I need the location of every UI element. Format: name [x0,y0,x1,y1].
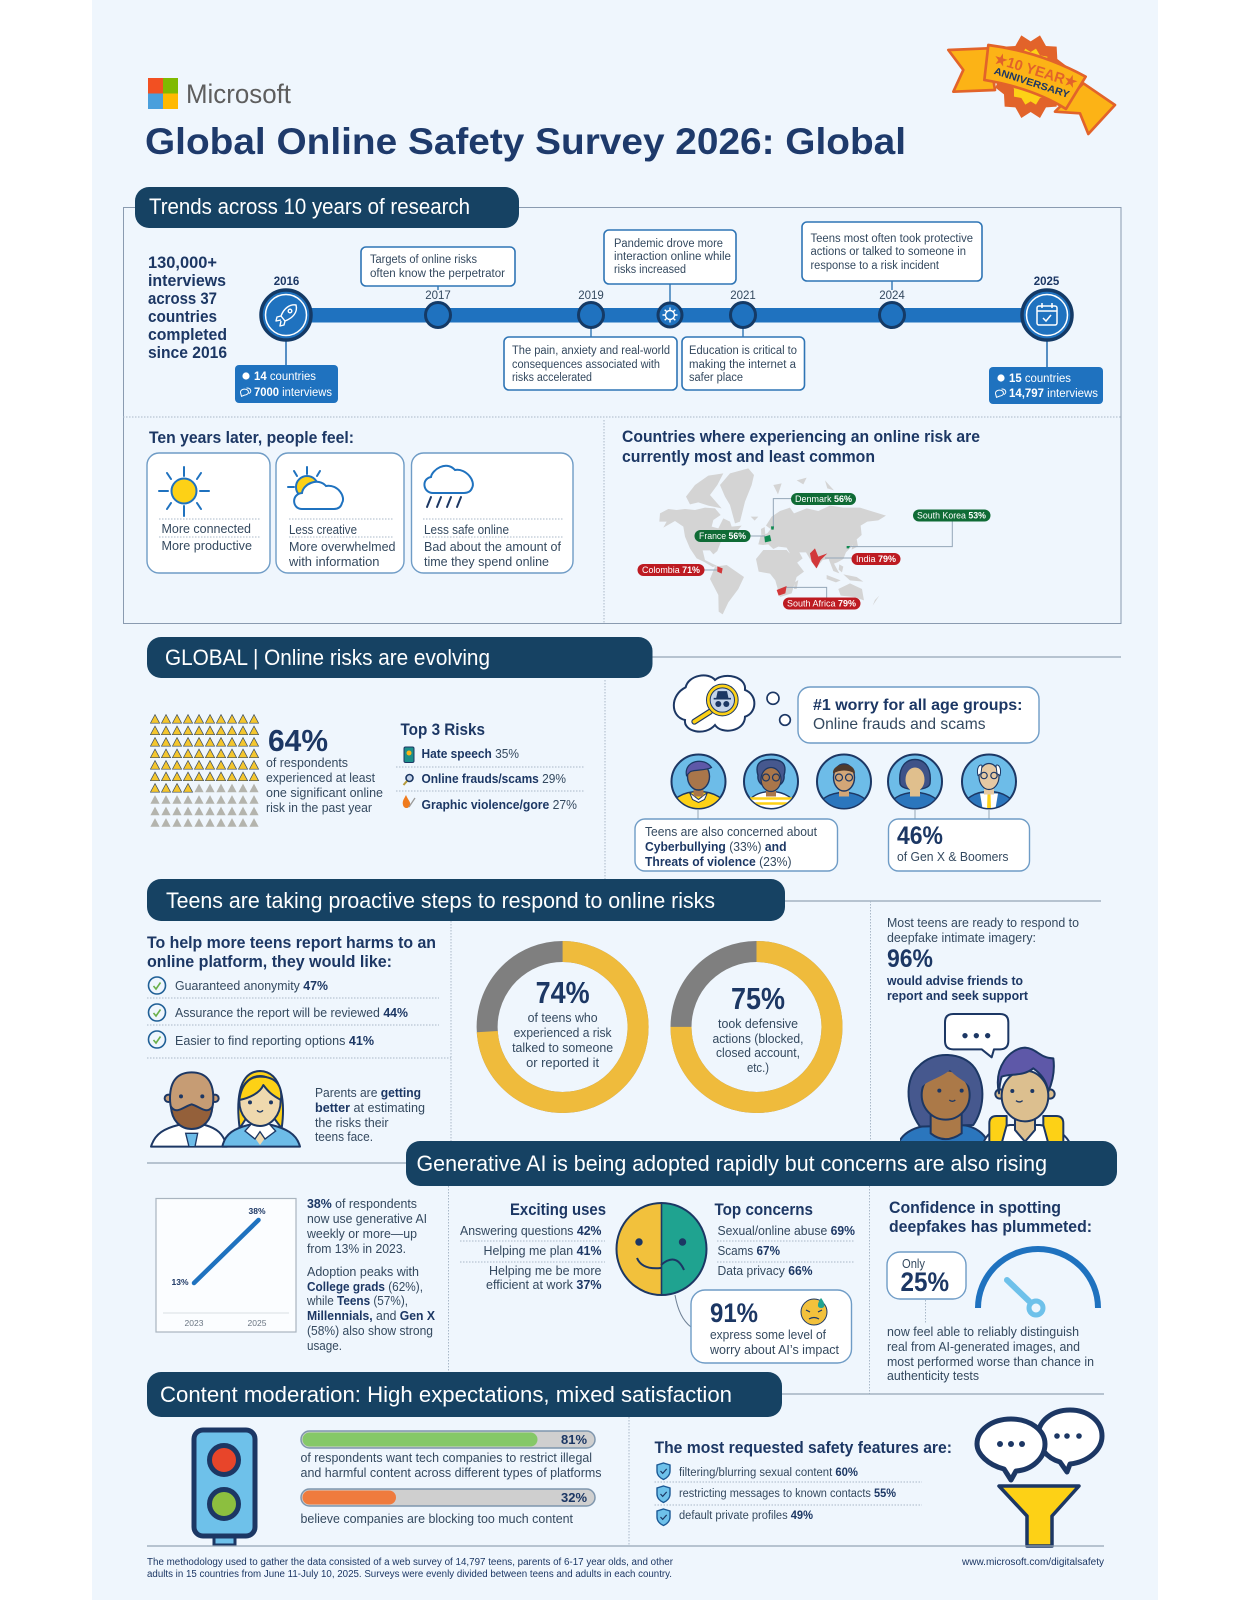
donut chart: 75%: etc.) [747,1061,769,1075]
callout: 2017 [361,247,515,286]
callout: pandemic: Pandemic drove more [614,238,723,250]
list: top concerns [714,1200,855,1278]
donut chart: 74%: talked to someone [512,1041,613,1055]
stat: 96%: report and seek support [887,989,1029,1003]
text: parents: teens face. [315,1130,373,1144]
card: sun [147,453,270,573]
heading: report harms [147,933,436,971]
world map [659,468,952,614]
list: top 3 risks: Graphic violence/gore 27% [422,798,577,812]
year labels [274,276,1060,302]
badge: 10 year anniversary: ★10 YEAR★ [992,51,1080,92]
stat: 64%: one significant online [266,786,383,800]
callout: #1 worry [798,687,1039,743]
avatar: boomer man [961,754,1017,810]
map label: India: India 79% [856,554,897,565]
map label: South Africa: South Africa 79% [787,598,857,610]
Microsoft logo: Microsoft [186,79,291,109]
list: safety features [654,1463,922,1526]
illustration: teens with speech bubble [898,1014,1070,1143]
icon: rocket [276,305,296,326]
callout: only 25%: 25% [900,1267,949,1297]
section heading: content moderation: Content moderation: High expectations, mixed satisfaction [160,1382,732,1407]
donut chart: 75%: took defensive [718,1017,798,1031]
list: exciting uses: efficient at work 37% [486,1278,602,1292]
card: partly cloudy: More overwhelmed [289,540,396,554]
card: sun: More productive [162,539,252,553]
heading: report harms: online platform, they would like: [147,952,392,971]
heading: countries [622,427,980,466]
icon: worried emoji [801,1298,827,1325]
text: adoption: usage. [307,1339,342,1353]
stat: 96%: deepfake intimate imagery: [887,931,1036,945]
callout: #1 worry: #1 worry for all age groups: [813,697,1022,714]
callout: 2021: making the internet a [689,359,797,371]
card: rain: Bad about the amount of [424,540,562,554]
callout: teens also concerned: Threats of violence (23%) [645,855,792,869]
section heading: online risks: GLOBAL | Online risks are evolving [165,645,490,670]
progress bar: 32% [300,1489,595,1526]
panel: trends across 10 years [123,187,1121,624]
stat box: 2016: 14 countries [254,371,316,383]
icon: two-sided face [616,1203,707,1295]
progress bar: 81%: 81% [561,1433,587,1447]
donut chart: 75%: closed account, [716,1046,800,1060]
card: rain: Less safe online [424,523,509,537]
callout: 2024 [802,222,982,281]
text: parents: better at estimating [315,1101,425,1115]
footer: methodology note [147,1557,674,1580]
map label: South Korea: South Korea 53% [917,510,987,522]
timeline [261,281,1072,367]
text: adoption: from 13% in 2023. [307,1242,406,1256]
callout: 91%: express some level of [710,1328,827,1342]
list: safety features: restricting messages to known contacts 55% [679,1488,896,1500]
list: top concerns: Data privacy 66% [718,1264,812,1278]
card: rain [412,453,573,573]
year labels: 2019 [578,290,604,302]
callout: 2024: response to a risk incident [810,260,940,272]
callout: teens also concerned: Teens are also concerned about [645,825,818,839]
checklist [148,977,408,1048]
icon: magnifier [404,774,413,785]
list: top concerns: Sexual/online abuse 69% [718,1224,855,1238]
donut chart: 75%: 75% [731,981,785,1016]
stat: 64%: experienced at least [266,771,376,785]
avatar: young man [816,754,872,810]
card: partly cloudy [276,453,404,573]
text: adoption: (58%) also show strong [307,1324,433,1338]
footer: methodology note: The methodology used to gather the data consisted of a web survey of 14,797 teens, parents of 6-17 year olds, and other [147,1557,674,1568]
text: adoption: Millennials, and Gen X [307,1309,436,1323]
callout: pandemic: interaction online while [614,251,731,263]
avatar: teen [670,754,726,810]
callout: pandemic [604,230,736,284]
stat box: 2016 [235,365,338,403]
stat: 130,000+ interviews: interviews [148,272,226,290]
text: adoption: weekly or more—up [306,1227,417,1241]
stat: 64%: risk in the past year [266,801,372,815]
gauge [978,1249,1098,1315]
text: adoption: College grads (62%), [307,1280,423,1294]
list: exciting uses: Exciting uses [510,1200,606,1219]
stat: 96%: 96% [887,945,933,973]
text: adoption: while Teens (57%), [306,1294,408,1308]
stat: 64%: 64% [268,723,328,758]
callout: teens also concerned: Cyberbullying (33%) and [645,840,786,854]
icon: gear [662,308,678,322]
text: deepfakes: now feel able to reliably distinguish [887,1325,1079,1339]
heading: deepfake confidence: Confidence in spotting [889,1198,1061,1217]
section heading: teens: Teens are taking proactive steps to respond to online risks [166,888,715,913]
text: deepfakes: real from AI-generated images, and [887,1340,1080,1354]
callout: 2019 [504,337,677,390]
callout: 2024: Teens most often took protective [810,233,973,245]
section heading: online risks [147,637,652,678]
map label: France: France 56% [699,531,747,542]
callout: 91%: worry about AI’s impact [709,1343,840,1357]
text: parents [315,1086,425,1144]
stat: 130,000+ interviews: across 37 [148,290,217,308]
icon: speech bubbles into funnel [977,1410,1102,1546]
icon: sun and cloud [288,467,343,509]
year labels: 2024 [879,290,905,302]
panel: teens proactive steps [147,879,1101,1163]
stat box: 2025: 14,797 interviews [1009,388,1098,400]
callout: teens also concerned [635,819,838,871]
list: exciting uses: Helping me plan 41% [484,1244,602,1258]
list: safety features: default private profiles 49% [679,1510,813,1522]
callout: 46%: 46% [897,822,943,850]
icon: flame [403,795,415,808]
checklist: Guaranteed anonymity 47% [175,979,328,993]
icon: sun [159,467,209,516]
donut chart: 74%: or reported it [526,1056,600,1070]
panel: online risks are evolving [147,637,1121,879]
stat: 96% [886,916,1079,1003]
map label: Denmark: Denmark 56% [795,494,853,505]
text: parents: the risks their [315,1116,388,1130]
year labels: 2016 [274,276,299,288]
list: top concerns: Top concerns [714,1200,813,1219]
callout: 46% [888,819,1030,871]
donut chart: 75%: actions (blocked, [712,1032,804,1046]
callout: 2021: Education is critical to [689,345,797,357]
icon: rain cloud [424,466,473,507]
section heading: generative AI [406,1141,1117,1186]
stat: 130,000+ interviews [148,254,227,362]
donut chart: 74% [487,952,638,1102]
icon: phone [404,747,414,762]
heading: deepfake confidence [889,1198,1092,1236]
callout: 46%: of Gen X & Boomers [897,850,1008,864]
card: partly cloudy: with information [288,555,380,569]
progress bar: 32%: believe companies are blocking too much content [300,1512,574,1526]
callout: 91%: 91% [710,1298,758,1328]
section heading: teens [147,879,785,921]
milestone 2025 [1022,290,1072,340]
heading: safety features: The most requested safety features are: [654,1438,952,1457]
section heading: generative AI: Generative AI is being adopted rapidly but concerns are also rising [416,1151,1047,1176]
progress bar: 32%: 32% [561,1491,587,1505]
panel: generative AI [156,1141,1117,1394]
stat box: 2016: 7000 interviews [254,387,332,399]
list: exciting uses: Answering questions 42% [460,1224,602,1238]
section heading: content moderation [147,1372,782,1417]
avatar: millennial woman [743,754,799,810]
year labels: 2025 [1034,276,1060,288]
heading: countries: Countries where experiencing an online risk are [622,427,980,446]
callout: #1 worry: Online frauds and scams [813,716,986,733]
card: sun: More connected [162,522,251,536]
text: adoption [306,1197,436,1353]
stat: 130,000+ interviews: countries [148,308,217,326]
heading: deepfake confidence: deepfakes has plummeted: [889,1217,1092,1236]
stat: 96%: would advise friends to [886,974,1023,988]
callout: 2019: consequences associated with [512,359,660,371]
callout: 2017: Targets of online risks [370,254,477,266]
callout: 2019: The pain, anxiety and real-world [512,345,670,357]
text: parents: Parents are getting [315,1086,421,1100]
stat box: 2025 [989,367,1103,404]
list: top concerns: Scams 67% [718,1244,780,1258]
donut chart: 74%: 74% [536,975,590,1010]
section heading: trends [135,187,519,228]
callout: only 25%: Only [902,1257,926,1271]
heading: report harms: To help more teens report harms to an [147,933,436,952]
milestone 2016 [261,290,311,340]
list: exciting uses [460,1200,606,1292]
badge: 10 year anniversary: ANNIVERSARY [992,66,1071,101]
year labels: 2021 [730,290,756,302]
thought cloud with magnifier [674,675,790,732]
line chart: adoption: 38% [248,1206,266,1216]
avatar: gen X woman [887,754,943,810]
line chart: adoption: 2025 [248,1318,267,1328]
text: adoption: now use generative AI [307,1212,427,1226]
Microsoft logo [148,78,291,109]
list: top 3 risks [396,721,584,812]
progress bar: 81%: and harmful content across different types of platforms [300,1466,602,1480]
stat: 130,000+ interviews: 130,000+ [148,254,217,272]
line chart: adoption: 13% [171,1277,189,1287]
progress bar: 81% [300,1431,602,1480]
heading: countries: currently most and least common [622,447,875,466]
panel: content moderation [147,1372,1104,1546]
callout: 2017: often know the perpetrator [370,268,505,280]
footer: url: www.microsoft.com/digitalsafety [961,1557,1104,1568]
stat box: 2025: 15 countries [1009,373,1071,385]
list: exciting uses: Helping me be more [489,1264,602,1278]
stat: 96%: Most teens are ready to respond to [887,916,1079,930]
text: deepfakes [887,1325,1094,1383]
callout: pandemic: risks increased [614,264,686,276]
line chart: adoption [156,1198,296,1332]
callout: 91% [675,1290,852,1363]
pictogram: 64 of 100 [150,714,260,829]
checklist: Easier to find reporting options 41% [175,1034,374,1048]
list: top 3 risks: Online frauds/scams 29% [422,772,566,786]
card: rain: time they spend online [424,555,549,569]
list: top 3 risks: Top 3 Risks [400,721,485,739]
stat: 64%: of respondents [266,756,348,770]
title: Global Online Safety Survey 2026: Global [145,121,906,162]
section heading: trends: Trends across 10 years of research [149,194,470,219]
donut chart: 74%: of teens who [528,1011,598,1025]
badge: 10 year anniversary [948,35,1115,134]
year labels: 2017 [425,290,451,302]
stat: 64% [266,723,383,815]
heading: ten years later: Ten years later, people feel: [149,428,354,447]
donut chart: 74%: experienced a risk [514,1026,612,1040]
callout: 2019: risks accelerated [512,372,592,384]
text: deepfakes: authenticity tests [887,1369,979,1383]
stat: 130,000+ interviews: completed [148,326,227,344]
callout: 2021 [682,337,804,390]
card: partly cloudy: Less creative [289,523,357,537]
callout: 2024: actions or talked to someone in [810,246,966,258]
map label: Colombia: Colombia 71% [642,565,701,576]
callout: 2021: safer place [689,372,743,384]
icon: calendar [1037,303,1057,325]
stat: 130,000+ interviews: since 2016 [148,344,227,362]
text: adoption: 38% of respondents [307,1197,417,1211]
list: top 3 risks: Hate speech 35% [422,747,519,761]
donut chart: 75% [681,952,832,1102]
list: safety features: filtering/blurring sexual content 60% [679,1467,858,1479]
footer: methodology note: adults in 15 countries from June 11-July 10, 2025. Surveys were evenly divided between teens and adults in each country. [147,1569,672,1580]
checklist: Assurance the report will be reviewed 44% [175,1006,408,1020]
text: deepfakes: most performed worse than chance in [887,1355,1094,1369]
icon: traffic light [194,1430,255,1545]
illustration: parents [151,1071,300,1147]
line chart: adoption: 2023 [185,1318,204,1328]
text: adoption: Adoption peaks with [307,1265,419,1279]
progress bar: 81%: of respondents want tech companies to restrict illegal [300,1451,592,1465]
callout: only 25% [887,1252,966,1323]
